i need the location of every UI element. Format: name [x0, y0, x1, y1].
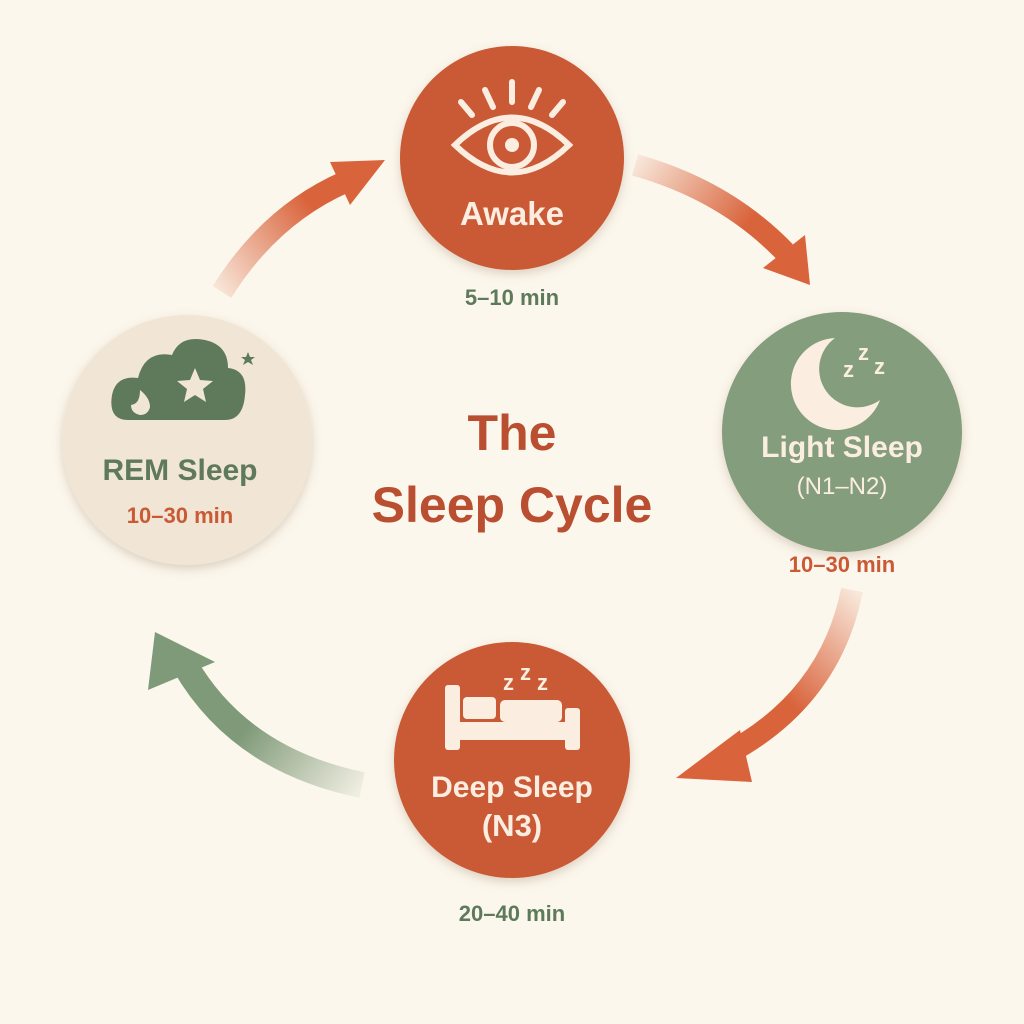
node: Awake: Awake — [460, 195, 564, 232]
icon: bed — [445, 660, 580, 750]
icon: moon — [791, 338, 880, 430]
arrow: Light Sleep to Deep Sleep — [676, 590, 852, 782]
icon: bed: z — [503, 670, 514, 695]
node: Deep Sleep: Deep Sleep — [431, 771, 593, 804]
title: Sleep Cycle — [372, 477, 652, 533]
node: Light Sleep — [722, 312, 962, 552]
duration: Awake: 5–10 min — [465, 285, 559, 310]
duration: Deep Sleep: 20–40 min — [459, 901, 565, 926]
node: Light Sleep: (N1–N2) — [797, 473, 887, 500]
node: Deep Sleep — [394, 642, 630, 878]
arrow: REM to Awake — [222, 160, 385, 292]
icon: bed: z — [537, 670, 548, 695]
node: Light Sleep: z — [858, 340, 869, 365]
title: The — [468, 405, 556, 461]
icon: eye — [455, 82, 569, 172]
duration: Light Sleep: 10–30 min — [789, 552, 895, 577]
node: REM Sleep: REM Sleep — [102, 454, 258, 487]
node: REM Sleep — [62, 315, 312, 565]
node: Light Sleep: Light Sleep — [761, 431, 923, 464]
node: Deep Sleep: (N3) — [482, 808, 542, 843]
node: Light Sleep: z — [843, 357, 854, 382]
icon: cloud with star — [111, 339, 255, 420]
node: REM Sleep: 10–30 min — [127, 503, 233, 528]
node: Awake — [400, 46, 624, 270]
node: Light Sleep: z — [874, 354, 885, 379]
arrow: Deep Sleep to REM — [148, 632, 362, 785]
icon: bed: z — [520, 660, 531, 685]
title — [372, 405, 652, 533]
arrow: Awake to Light Sleep — [635, 165, 810, 285]
